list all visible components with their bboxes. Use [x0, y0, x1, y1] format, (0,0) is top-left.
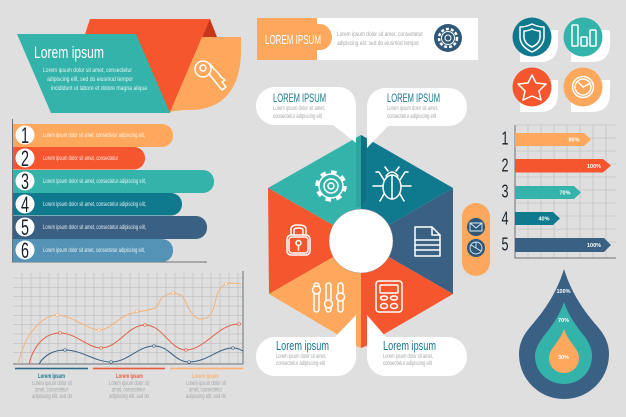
- icon: sliders: [312, 283, 344, 312]
- chart: nested drop: 70%: [558, 318, 569, 324]
- callout: bottom right bubble: Lorem ipsum dolor sit amet,: [383, 353, 433, 360]
- legend: chart series: Lorem ipsum: [38, 373, 65, 380]
- chart: hexagon diagram: [268, 135, 453, 348]
- panel: header banner: [257, 18, 478, 60]
- callout: bottom right bubble: [367, 315, 467, 376]
- chart: line chart: [13, 271, 243, 364]
- panel: numbered bar list: 1: [21, 123, 29, 148]
- panel: numbered bar list: Lorem ipsum dolor sit amet, consectetur adipiscing elit,: [43, 224, 146, 231]
- panel: numbered bar list: Lorem ipsum dolor sit amet, consectetur: [43, 155, 119, 162]
- chart: horizontal percentage bars: 3: [502, 182, 508, 202]
- icon: shield badge: [512, 18, 558, 62]
- chart: nested drop: 100%: [556, 289, 571, 295]
- callout: bottom left bubble: consectetur adipiscing elit: [276, 360, 325, 367]
- callout: top right bubble: [367, 88, 467, 148]
- legend: chart series: Lorem ipsum: [116, 373, 143, 380]
- icon: padlock: [287, 225, 310, 255]
- chart: horizontal percentage bars: 80%: [568, 138, 580, 144]
- callout: top right bubble: LOREM IPSUM: [387, 91, 440, 105]
- text block: ribbon description: Lorem ipsum dolor sit amet, consectetur: [43, 67, 133, 74]
- callout: bottom right bubble: consectetur adipiscing elit: [383, 360, 432, 367]
- panel: numbered bar list: 2: [21, 146, 29, 171]
- panel: side pill with icons: [462, 203, 490, 276]
- text block: ribbon description: adipiscing elit, sed do eiusmod tempor: [47, 76, 134, 83]
- chart: horizontal percentage bars: 70%: [559, 190, 571, 196]
- legend: chart series: [15, 368, 243, 400]
- callout: top right bubble: Lorem ipsum dolor sit amet,: [387, 105, 438, 112]
- legend: chart series: amet, consectetur: [189, 386, 223, 394]
- callout: bottom right bubble: Lorem ipsum: [383, 339, 436, 353]
- chart: horizontal percentage bars: 4: [502, 208, 508, 228]
- chart: nested drop: [519, 269, 609, 399]
- legend: chart series: Lorem ipsum: [192, 373, 219, 380]
- panel: numbered bar list: [12, 119, 214, 263]
- icon: clock badge: [564, 68, 610, 112]
- text block: ribbon description: [43, 67, 147, 92]
- panel: numbered bar list: Lorem ipsum dolor sit amet, consectetur adipiscing elit,: [43, 132, 145, 139]
- legend: chart series: adipiscing elit, sed do: [186, 393, 226, 400]
- panel: folded ribbon heading: [17, 19, 241, 113]
- legend: chart series: adipiscing elit, sed do: [32, 393, 72, 400]
- panel: header banner: LOREM IPSUM: [265, 32, 321, 47]
- icon: bar chart badge: [564, 18, 610, 62]
- chart: horizontal percentage bars: [502, 125, 616, 258]
- icon: pie chart: [467, 239, 485, 257]
- legend: chart series: Lorem ipsum dolor sit: [109, 380, 149, 387]
- callout: top left bubble: LOREM IPSUM: [273, 91, 326, 105]
- legend: chart series: Lorem ipsum dolor sit: [32, 380, 72, 387]
- icon: mail: [467, 218, 485, 236]
- center circle: [329, 209, 393, 273]
- chart: nested drop: 30%: [558, 355, 569, 361]
- icon: gear: [317, 172, 345, 200]
- chart: horizontal percentage bars: 100%: [587, 243, 601, 249]
- icon: key: [195, 61, 226, 90]
- panel: header banner: Lorem ipsum dolor sit amet, consectetur: [337, 31, 424, 38]
- callout: top left bubble: Lorem ipsum dolor sit amet,: [273, 105, 325, 112]
- text block: ribbon description: incididunt ut labore et dolore magna aliqua: [51, 85, 147, 92]
- panel: numbered bar list: Lorem ipsum dolor sit amet, consectetur adipiscing elit,: [43, 201, 146, 208]
- callout: top right bubble: consectetur adipiscing elit: [387, 113, 436, 120]
- legend: chart series: Lorem ipsum dolor sit: [186, 380, 226, 387]
- icon: star badge: [512, 68, 558, 112]
- icon: gear badge: [434, 24, 462, 52]
- callout: bottom left bubble: [256, 315, 356, 376]
- callout: top left bubble: [256, 87, 356, 143]
- chart: horizontal percentage bars: 100%: [587, 164, 601, 170]
- legend: chart series: adipiscing elit, sed do: [109, 393, 149, 400]
- legend: chart series: amet, consectetur: [112, 386, 146, 394]
- chart: horizontal percentage bars: 5: [502, 234, 508, 254]
- panel: header banner: adipiscing elit, sed do eiusmod tempor: [337, 40, 420, 47]
- heading: lorem ipsum: Lorem ipsum: [34, 43, 104, 62]
- chart: horizontal percentage bars: 1: [502, 128, 508, 148]
- chart: horizontal percentage bars: 40%: [538, 216, 550, 222]
- icon: calculator: [376, 281, 402, 312]
- panel: numbered bar list: 4: [21, 192, 29, 217]
- icon: bug: [373, 167, 411, 201]
- chart: horizontal percentage bars: 2: [502, 156, 508, 176]
- callout: bottom left bubble: Lorem ipsum dolor sit amet,: [276, 353, 326, 360]
- panel: numbered bar list: 5: [21, 215, 29, 240]
- callout: top left bubble: consectetur adipiscing elit: [273, 113, 322, 120]
- panel: numbered bar list: 3: [21, 169, 29, 194]
- panel: numbered bar list: Lorem ipsum dolor sit amet, consectetur adipiscing elit,: [43, 247, 145, 254]
- callout: bottom left bubble: Lorem ipsum: [276, 339, 329, 353]
- panel: numbered bar list: Lorem ipsum dolor sit amet, consectetur adipiscing elit,: [43, 178, 146, 185]
- panel: numbered bar list: 6: [21, 238, 29, 263]
- legend: chart series: amet, consectetur: [35, 386, 69, 394]
- icon: document: [415, 227, 440, 256]
